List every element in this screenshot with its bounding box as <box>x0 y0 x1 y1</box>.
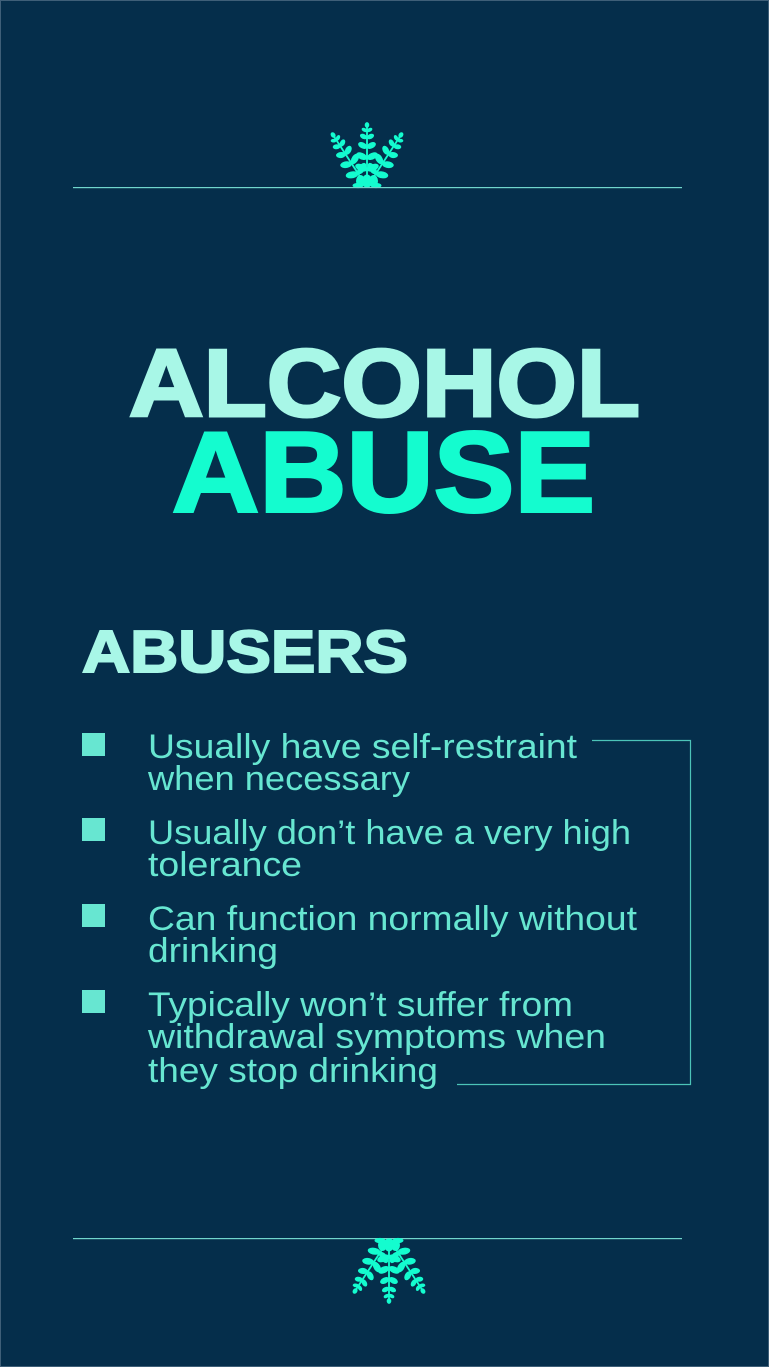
list item 4: withdrawal symptoms when <box>147 1018 606 1056</box>
list item 2 <box>82 814 631 884</box>
list item 4: Typically won’t suffer from <box>148 986 573 1024</box>
list item 3: Can function normally without <box>148 900 638 938</box>
list item 1 <box>82 728 578 798</box>
top divider <box>73 187 682 188</box>
title line: ALCOHOL: ALCOHOL <box>129 330 640 437</box>
icon: top plant ornament <box>320 122 414 188</box>
icon: bottom plant ornament <box>342 1238 436 1304</box>
bracket around list <box>457 740 690 1084</box>
list item 4 <box>82 986 606 1090</box>
list item 2: Usually don’t have a very high <box>148 814 631 852</box>
list item 3 <box>82 900 638 970</box>
list item 4: they stop drinking <box>148 1052 438 1090</box>
title <box>129 330 640 536</box>
title line: ABUSE: ABUSE <box>172 410 595 536</box>
section heading: abusers: ABUSERS <box>82 619 408 685</box>
list item 1: when necessary <box>147 760 410 798</box>
list item 2: tolerance <box>148 846 302 884</box>
bottom divider <box>73 1238 682 1239</box>
list item 3: drinking <box>148 932 278 970</box>
bullet list <box>82 728 638 1090</box>
list item 1: Usually have self-restraint <box>148 728 578 766</box>
